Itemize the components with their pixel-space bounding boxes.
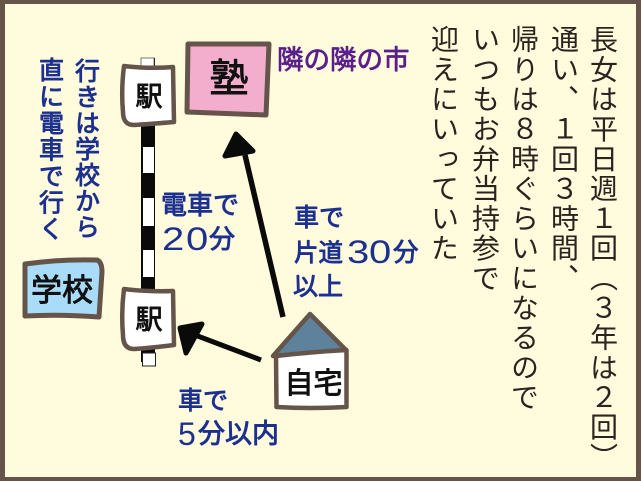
arrow: home to cram school	[225, 134, 283, 317]
label: car 5 minutes: 5	[178, 416, 196, 452]
station: lower	[122, 289, 174, 349]
cram school box: 塾	[209, 48, 249, 104]
label: car one way 30 minutes: 片道	[294, 234, 343, 269]
label: neighbouring city: 隣の隣の市	[277, 38, 410, 77]
label: car one way 30 minutes: 分	[393, 232, 419, 269]
label: car 5 minutes: 分以内	[198, 412, 279, 451]
label: car one way 30 minutes: 以上	[293, 267, 343, 303]
station: upper: 駅	[136, 75, 162, 114]
school box: 学校	[31, 265, 93, 310]
label: train 20 minutes: 0	[186, 221, 208, 257]
house: home	[273, 314, 346, 408]
blue vertical note	[34, 57, 106, 242]
label: car 5 minutes	[178, 381, 279, 452]
label: train 20 minutes: 2	[162, 221, 184, 257]
railway track	[141, 58, 156, 366]
narration text: 迎えにいっていた	[425, 25, 465, 263]
station: upper	[122, 66, 174, 125]
narration text	[425, 25, 624, 472]
label: car one way 30 minutes	[293, 198, 419, 303]
house: home: 自宅	[284, 360, 343, 402]
station: lower: 駅	[136, 298, 162, 337]
cram school box	[187, 44, 269, 115]
arrow: home to station	[180, 324, 261, 360]
label: train 20 minutes: 電車で	[161, 185, 239, 222]
school box	[25, 260, 102, 317]
blue vertical note: 行きは学校から	[70, 58, 106, 240]
label: car one way 30 minutes: 車で	[294, 198, 344, 234]
narration text: 長女は平日週１回（３年は２回）	[584, 25, 624, 472]
narration text: いつもお弁当持参で	[466, 25, 506, 293]
label: train 20 minutes: 分	[209, 219, 235, 256]
label: car one way 30 minutes: 3	[347, 234, 369, 270]
blue vertical note: 直に電車で行く	[34, 57, 70, 242]
label: car one way 30 minutes: 0	[369, 234, 391, 270]
narration text: 帰りは８時ぐらいになるので	[505, 25, 545, 412]
label: car 5 minutes: 車で	[178, 381, 228, 417]
narration text: 通い、１回３時間、	[545, 25, 585, 293]
label: train 20 minutes	[161, 185, 239, 257]
